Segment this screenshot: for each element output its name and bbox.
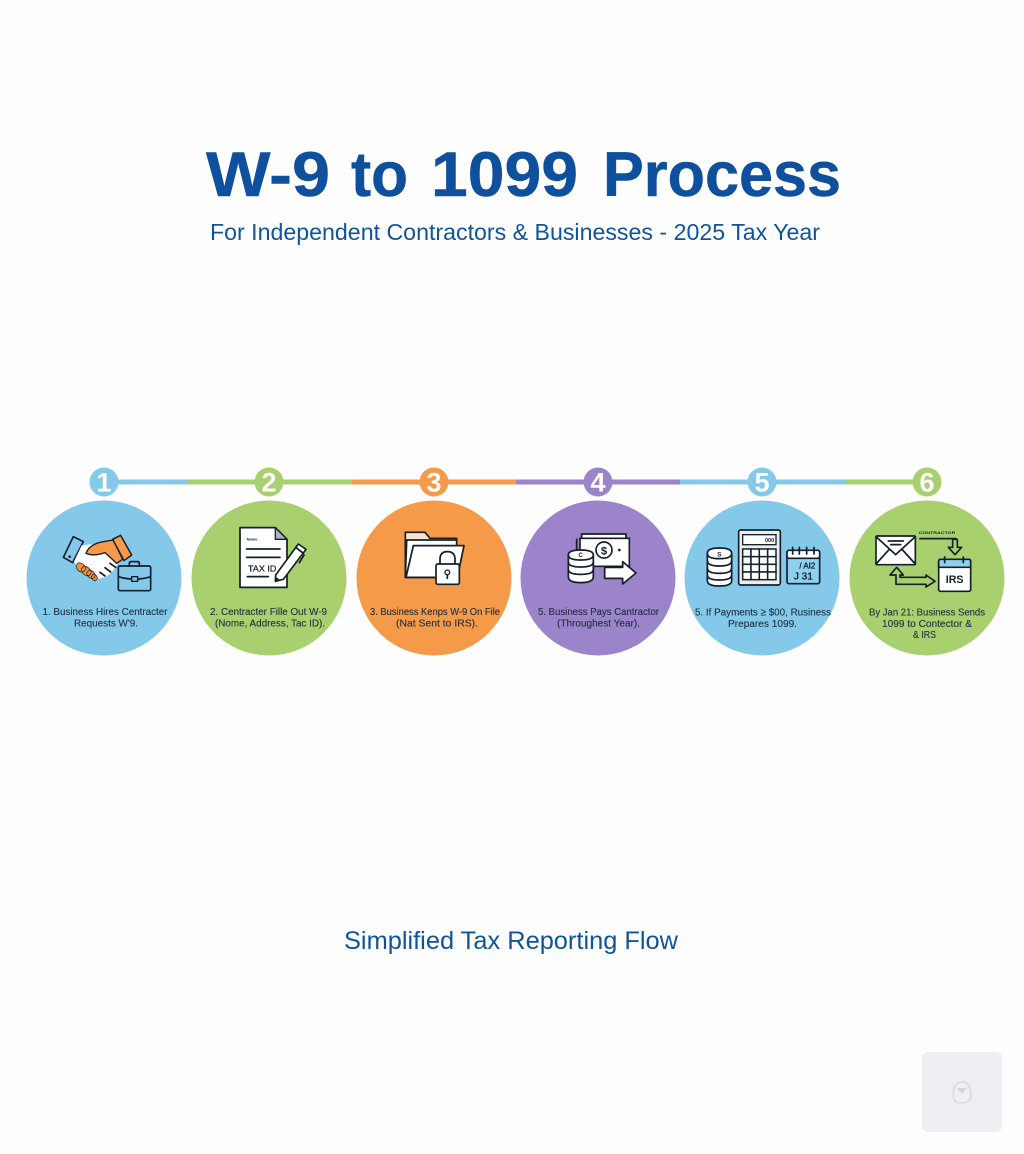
icon: locked folder: [405, 532, 464, 584]
timeline connector: [104, 480, 927, 484]
step 4 caption: (Throughest Year).: [557, 618, 640, 630]
watermark badge: [922, 1052, 1002, 1132]
icon: coins, banknote and arrow: [568, 534, 636, 584]
icon: coins, calculator and calendar: S: [717, 551, 722, 558]
subtitle: For Independent Contractors & Businesses - 2025 Tax Year: [210, 219, 820, 245]
step 6 panel: [850, 468, 1004, 656]
step 2 number: [254, 468, 284, 498]
step 3 panel: [356, 468, 512, 656]
icon: envelope, arrows and IRS calendar: CONTRACTOR: [919, 531, 956, 535]
step 3 caption: [370, 606, 500, 630]
step 6 number: [912, 468, 942, 498]
step 2 panel: [192, 468, 346, 656]
step 4 caption: [538, 606, 659, 630]
step 4 caption: 5. Business Pays Cantractor: [538, 606, 659, 618]
step 1 number: [90, 468, 118, 498]
step 6 caption: By Jan 21: Business Sends: [869, 606, 985, 618]
icon: tax form and pen: TAX ID: [248, 564, 277, 573]
step 2 circle: [192, 500, 346, 656]
step 1 caption: [42, 606, 168, 630]
step 6 circle: [850, 500, 1004, 656]
step 5 caption: [695, 606, 831, 630]
step 4 circle: [520, 500, 676, 656]
title: to: [351, 140, 408, 210]
step 2 caption: (Nome, Address, Tac ID).: [215, 618, 325, 630]
icon: tax form and pen: [240, 528, 306, 587]
step 6 caption: & IRS: [913, 629, 936, 641]
step 1 caption: Requests W'9.: [74, 618, 138, 630]
title: W-9: [206, 140, 330, 210]
icon: coins, calculator and calendar: [707, 530, 820, 586]
step 4 number: [584, 468, 612, 498]
step 3 number: [420, 468, 448, 498]
icon: coins, banknote and arrow: C: [579, 553, 584, 559]
step 3 caption: 3. Business Kenps W-9 On File: [370, 606, 500, 618]
icon: envelope, arrows and IRS calendar: IRS: [946, 574, 964, 586]
icon: handshake and briefcase: [63, 535, 151, 591]
step 5 panel: [684, 468, 840, 656]
icon: coins, calculator and calendar: 000: [765, 538, 774, 544]
step 1 circle: [26, 500, 182, 656]
step 3 circle: [356, 500, 512, 656]
step 2 caption: 2. Centracter Fille Out W-9: [210, 606, 327, 618]
step 1 number: 1: [96, 468, 112, 498]
step 3 caption: (Nat Sent to IRS).: [396, 618, 478, 630]
step 5 caption: 5. If Payments ≥ $00, Rusiness: [695, 606, 831, 618]
step 3 number: 3: [426, 468, 442, 498]
step 6 number: 6: [919, 468, 935, 498]
icon: tax form and pen: Name: [247, 537, 258, 542]
step 2 caption: [210, 606, 327, 630]
icon: coins, calculator and calendar: J 31: [794, 571, 813, 582]
title: Process: [603, 140, 841, 210]
step 6 caption: [869, 606, 985, 641]
step 6 caption: 1099 to Contector &: [882, 618, 972, 630]
step 5 number: 5: [754, 468, 770, 498]
step 4 number: 4: [590, 468, 606, 498]
icon: coins, banknote and arrow: $: [601, 545, 608, 557]
icon: coins, calculator and calendar: / AI2: [799, 561, 816, 570]
step 2 number: 2: [261, 468, 277, 498]
title: 1099: [431, 140, 578, 210]
step 5 number: [748, 468, 776, 498]
footer tagline: Simplified Tax Reporting Flow: [344, 927, 679, 955]
step 1 caption: 1. Business Hires Centracter: [42, 606, 168, 618]
step 5 caption: Prepares 1099.: [728, 618, 797, 630]
step 5 circle: [684, 500, 840, 656]
step 1 panel: [26, 468, 182, 656]
icon: envelope, arrows and IRS calendar: [876, 531, 971, 591]
step 4 panel: [520, 468, 676, 656]
